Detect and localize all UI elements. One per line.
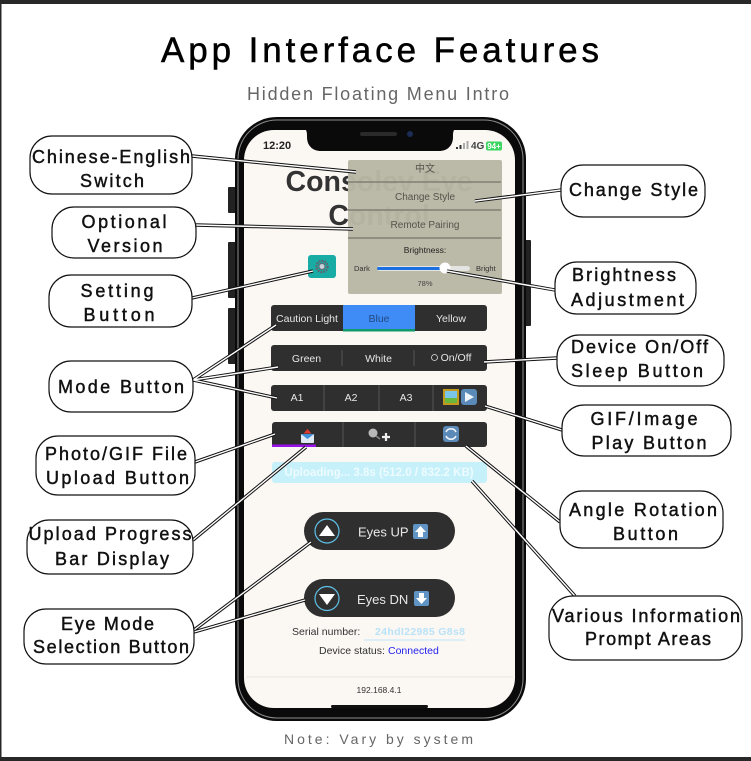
serial number: Serial number: (292, 626, 360, 638)
brightness slider: Brightness: (404, 245, 446, 255)
phone mockup (228, 117, 531, 721)
eyes down button: Eyes DN (357, 592, 408, 607)
callout: Device On/Off Sleep Button (557, 335, 724, 386)
button row: colors and power: White (365, 353, 392, 365)
app heading behind menu (286, 166, 472, 232)
button row: upload, add, rotate (272, 422, 487, 447)
callout: Various Information Prompt Areas: Prompt Areas (585, 629, 711, 649)
phone body (235, 117, 526, 721)
eyes up button: Eyes UP (358, 524, 409, 540)
status bar: 4G (471, 141, 485, 152)
eyes up button (304, 512, 455, 550)
menu item: remote pairing: Remote Pairing (391, 220, 459, 231)
callout: Chinese-English Switch: Chinese-English (32, 147, 190, 167)
callout: Brightness Adjustment: Adjustment (571, 290, 684, 310)
button row: A1 A2 A3 and play (271, 385, 487, 411)
app heading behind menu: Consolev Eye (286, 166, 472, 198)
device status (319, 645, 439, 657)
callout: Eye Mode Selection Button: Selection Button (33, 637, 189, 657)
device status: Device status: (319, 645, 385, 657)
callout: Chinese-English Switch (30, 136, 192, 194)
callout: Setting Button: Button (84, 305, 154, 325)
eyes down button (304, 579, 455, 617)
callout: Angle Rotation Button: Button (613, 524, 678, 544)
callout: Upload Progress Bar Display (27, 520, 193, 574)
icon: down arrow (414, 591, 429, 606)
button row: light modes: Blue (368, 313, 390, 325)
button row: A1 A2 A3 and play: A1 (291, 392, 304, 404)
callout: Optional Version: Version (88, 236, 162, 256)
serial number (292, 626, 465, 640)
callout: Various Information Prompt Areas: Various Information (552, 606, 740, 626)
icon: rotate (443, 426, 459, 442)
callout: Device On/Off Sleep Button: Sleep Button (571, 361, 703, 381)
phone screen (244, 130, 515, 708)
subtitle: Hidden Floating Menu Intro (247, 84, 509, 104)
callout: Upload Progress Bar Display: Bar Display (55, 549, 169, 569)
app heading behind menu: Control (328, 200, 430, 232)
callout: Brightness Adjustment (555, 262, 696, 314)
upload progress bar (272, 462, 487, 483)
menu item: change style: Change Style (395, 192, 455, 203)
title: App Interface Features (161, 31, 599, 70)
callout: Change Style (561, 165, 705, 217)
button row: colors and power (271, 345, 487, 371)
status bar: 12:20 (263, 140, 291, 152)
icon: magnifier plus (368, 428, 390, 441)
device status: Connected (388, 645, 439, 657)
callout: Setting Button: Setting (80, 281, 154, 301)
button row: light modes: Yellow (436, 313, 466, 325)
callout: GIF/Image Play Button: GIF/Image (590, 409, 698, 429)
ip address: 192.168.4.1 (357, 685, 402, 695)
button row: A1 A2 A3 and play: A2 (345, 392, 358, 404)
icon: upload tray (301, 429, 314, 443)
brightness slider: 78% (417, 279, 433, 288)
callout: Eye Mode Selection Button (24, 609, 194, 664)
brightness slider (354, 245, 497, 288)
button row: colors and power: Green (292, 353, 321, 365)
callout: Angle Rotation Button: Angle Rotation (569, 500, 717, 520)
callout: Brightness Adjustment: Brightness (572, 265, 676, 285)
callout: Photo/GIF File Upload Button (36, 436, 195, 495)
callout: Chinese-English Switch: Switch (80, 171, 144, 191)
status bar (263, 140, 502, 152)
callout: Angle Rotation Button (560, 491, 723, 548)
brightness slider: Dark (354, 264, 370, 273)
callout: Optional Version: Optional (82, 212, 166, 232)
callout: Mode Button (49, 361, 193, 412)
notch (304, 128, 456, 151)
callout: Photo/GIF File Upload Button: Photo/GIF File (45, 444, 187, 464)
home indicator (331, 705, 428, 708)
brightness slider: Bright (476, 264, 497, 273)
phone side buttons (228, 187, 531, 364)
callout: GIF/Image Play Button: Play Button (592, 433, 706, 453)
callout: Mode Button: Mode Button (58, 377, 184, 397)
button row: colors and power: On/Off (441, 352, 471, 364)
status bar: 94+ (487, 142, 501, 151)
serial number: 24hdI22985 G8s8 (375, 626, 465, 638)
upload progress bar: Uploading... 3.8s (512.0 / 832.2 KB) (284, 467, 474, 479)
footnote: Note: Vary by system (284, 731, 473, 747)
connector lines (192, 156, 575, 632)
setting gear button (308, 255, 336, 278)
callout: Device On/Off Sleep Button: Device On/Off (571, 337, 709, 357)
icon: play (461, 389, 477, 405)
button row: light modes (271, 305, 487, 332)
callout: Eye Mode Selection Button: Eye Mode (61, 614, 154, 634)
button row: light modes: Caution Light (276, 313, 338, 325)
callout: GIF/Image Play Button (562, 405, 731, 456)
hidden floating menu (348, 160, 502, 294)
callout: Setting Button (49, 275, 192, 327)
button row: A1 A2 A3 and play: A3 (400, 392, 413, 404)
callout: Photo/GIF File Upload Button: Upload Button (46, 468, 189, 488)
callout: Optional Version (52, 207, 196, 258)
menu item: language: 中文 (415, 162, 435, 175)
icon: image (443, 389, 459, 405)
icon: up arrow (413, 524, 428, 539)
callout: Upload Progress Bar Display: Upload Progress (28, 524, 192, 544)
callout: Various Information Prompt Areas (549, 596, 742, 660)
callout: Change Style: Change Style (569, 180, 698, 200)
